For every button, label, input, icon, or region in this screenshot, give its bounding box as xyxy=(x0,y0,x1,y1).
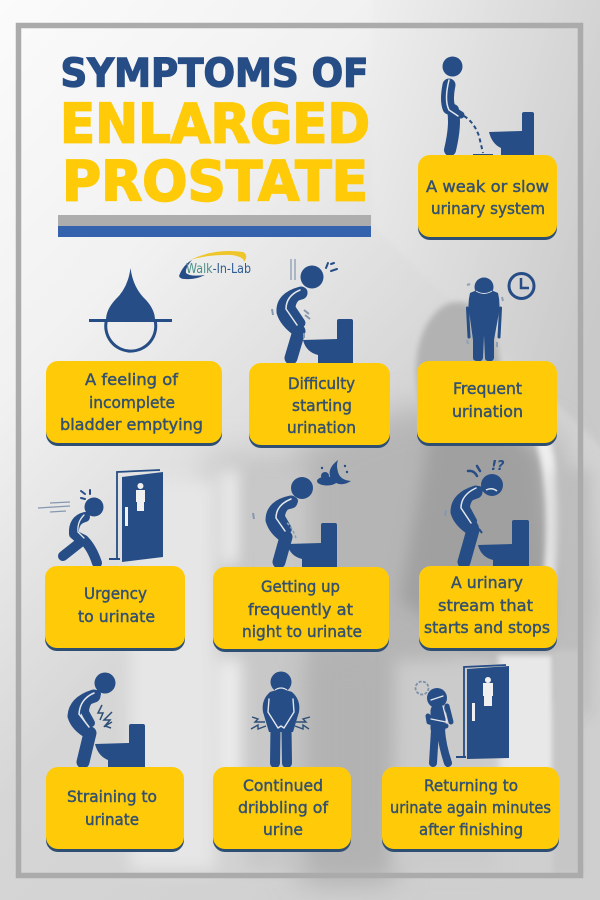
title line: symptoms of: SYMPTOMS OF xyxy=(60,52,368,96)
icon: frequent urination man with clock xyxy=(467,274,534,361)
callout: getting up at night: frequently at xyxy=(248,600,353,619)
restroom man sign xyxy=(136,483,145,511)
callout: frequent urination: urination xyxy=(452,402,523,421)
icon: man urinating weakly with toilet xyxy=(442,56,534,156)
title xyxy=(60,52,370,214)
callout: frequent urination: Frequent xyxy=(453,379,522,398)
callout: straining to urinate: Straining to xyxy=(67,787,157,806)
exclamation and question marks: !? xyxy=(491,459,505,474)
callout: difficulty starting urination xyxy=(249,363,390,448)
callout: straining to urinate: urinate xyxy=(85,810,139,829)
callout: urgency to urinate: Urgency xyxy=(84,584,147,603)
title line: prostate: PROSTATE xyxy=(62,150,368,214)
moon and cloud xyxy=(317,460,351,486)
logo: Walk-In-Lab: Walk-In-Lab xyxy=(186,262,251,277)
callout: stream starts and stops: A urinary xyxy=(451,573,523,592)
callout: a weak or slow urinary system: urinary system xyxy=(431,199,545,218)
icon: man at night with moon xyxy=(253,460,351,567)
callout: returning to urinate again: after finishing xyxy=(419,820,523,839)
callout: continued dribbling: dribbling of xyxy=(238,798,328,817)
clock xyxy=(509,274,534,298)
icon: man struggling to start xyxy=(272,259,353,363)
callout: difficulty starting urination: Difficulty xyxy=(288,374,355,393)
icon: frontal man with dribbling pain xyxy=(251,672,310,763)
callout: returning to urinate again: urinate again minutes xyxy=(390,798,551,817)
callout: stream starts and stops: stream that xyxy=(438,596,533,615)
callout: getting up at night: Getting up xyxy=(261,577,340,596)
callout: stream starts and stops xyxy=(419,566,557,651)
callout: returning to urinate again: Returning to xyxy=(424,776,518,795)
callout: urgency to urinate xyxy=(45,566,185,651)
callout: incomplete bladder emptying xyxy=(46,361,222,446)
logo: Walk-In-Lab xyxy=(179,251,251,279)
icon: bathroom door with man in a hurry xyxy=(38,470,163,563)
callout: difficulty starting urination: starting xyxy=(292,396,352,415)
icon: bathroom door with dizzy man xyxy=(416,665,509,763)
callout: getting up at night: night to urinate xyxy=(242,622,362,641)
callout: stream starts and stops: starts and stops xyxy=(424,618,550,637)
callout: difficulty starting urination: urination xyxy=(287,418,356,437)
callout: continued dribbling: Continued xyxy=(243,776,323,795)
callout: incomplete bladder emptying: incomplete xyxy=(89,393,175,412)
callout: continued dribbling: urine xyxy=(263,820,303,839)
icon: man surprised with stop-start stream xyxy=(445,459,529,566)
icon: man straining with lightning xyxy=(74,672,145,767)
callout: getting up at night xyxy=(213,567,389,652)
icon: water drop over bladder xyxy=(89,268,172,351)
title line: enlarged: ENLARGED xyxy=(60,92,370,156)
restroom man sign xyxy=(483,677,493,706)
callout: straining to urinate xyxy=(46,767,184,852)
callout: urgency to urinate: to urinate xyxy=(78,607,155,626)
callout: frequent urination xyxy=(417,361,557,446)
callout: incomplete bladder emptying: A feeling of xyxy=(85,370,178,389)
callout: a weak or slow urinary system xyxy=(418,155,557,240)
callout: a weak or slow urinary system: A weak or slow xyxy=(426,177,549,196)
callout: returning to urinate again xyxy=(382,767,559,852)
callout: incomplete bladder emptying: bladder emptying xyxy=(60,415,203,434)
title underline bars xyxy=(58,215,371,237)
callout: continued dribbling xyxy=(213,767,351,852)
